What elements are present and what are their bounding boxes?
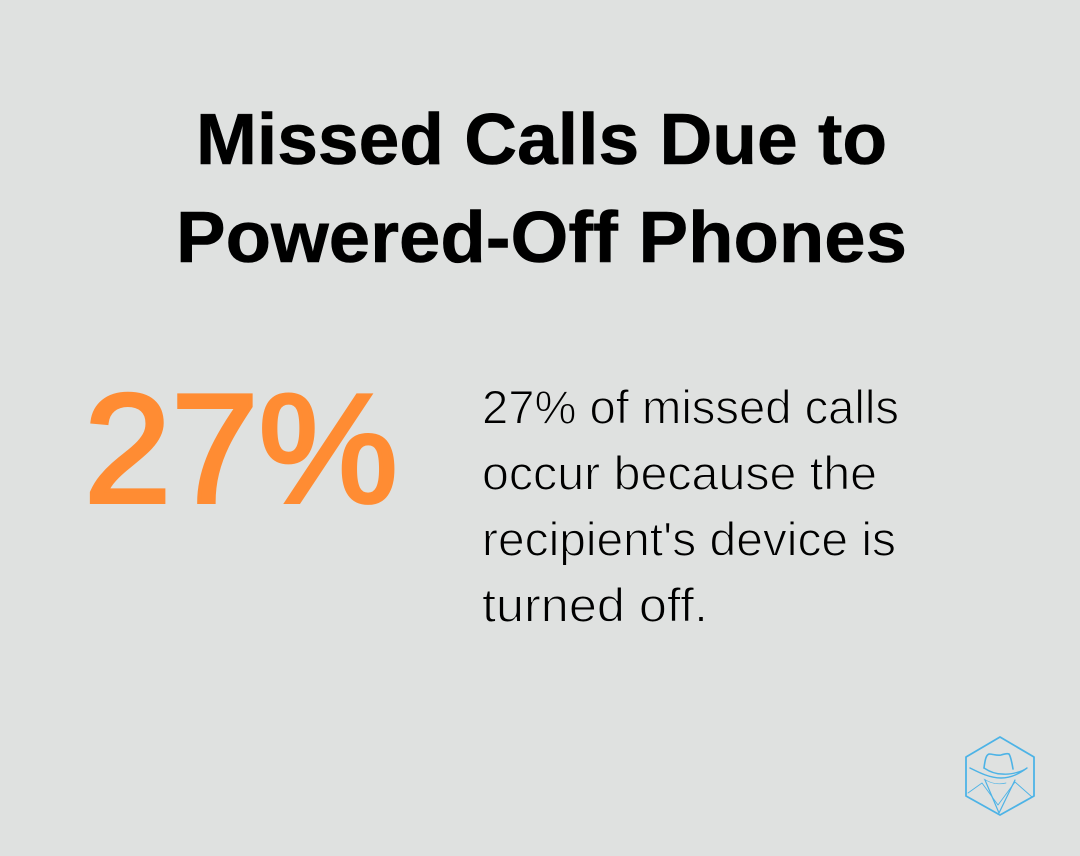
icon: hat logo in hexagon: [966, 737, 1034, 815]
description text: 27% of missed calls: [482, 382, 899, 434]
title: Missed Calls Due to: [196, 100, 887, 180]
description text: turned off.: [482, 580, 708, 632]
description text: recipient's device is: [482, 514, 896, 566]
title: [176, 100, 907, 278]
title: Powered-Off Phones: [176, 198, 907, 278]
description text: occur because the: [482, 448, 877, 500]
description text: [482, 382, 899, 632]
big statistic: 27%: 27%: [84, 362, 398, 535]
